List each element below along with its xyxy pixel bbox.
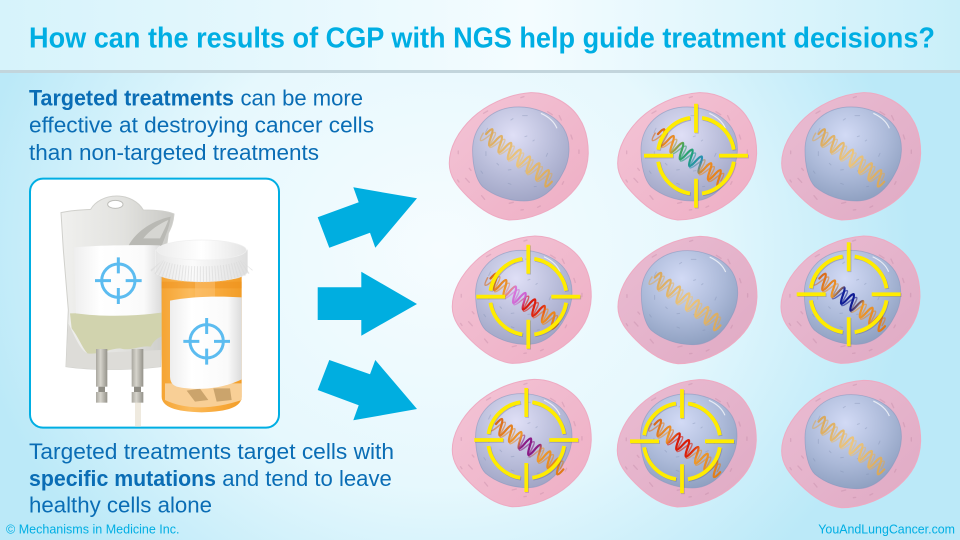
cell: row 1 column 3 [782,93,921,220]
copyright: © Mechanisms in Medicine Inc. [6,521,180,536]
reticle [474,388,579,493]
header band [0,0,960,73]
reticle [630,389,735,494]
cell: row 2 column 3, targeted [781,236,920,363]
text block: targeted treatments intro [29,86,374,165]
text block: specific mutations: Targeted treatments target cells with [29,439,394,464]
helix: healthy [479,126,556,189]
helix: healthy [648,270,725,332]
text block: specific mutations [29,439,394,518]
reticle [797,242,902,347]
reticle [644,104,749,208]
text block: targeted treatments intro: effective at destroying cancer cells [29,113,374,138]
reticle [476,245,581,350]
helix: purple mutation [489,416,568,476]
cell: row 1 column 1 [449,93,588,220]
arrow: upper [318,187,417,248]
website: YouAndLungCancer.com [818,521,955,536]
cell: row 3 column 2, targeted [617,380,756,507]
helix: healthy [811,126,889,189]
icon: pill bottle [156,240,248,412]
cell: row 3 column 3 [782,380,921,508]
helix: red mutation [647,417,725,479]
text block: targeted treatments intro: Targeted treatments [29,86,234,111]
text block: targeted treatments intro: than non-targeted treatments [29,140,319,165]
text block: targeted treatments intro: can be more [240,86,363,111]
text block: specific mutations: and tend to leave [222,466,392,491]
helix: healthy [811,414,889,476]
arrow: middle [318,272,417,336]
icon: IV bag [61,196,174,427]
cell: row 1 column 2, targeted [618,93,757,220]
cell: row 3 column 1, targeted [452,379,591,507]
text block: specific mutations: healthy cells alone [29,493,212,518]
helix: green mutation [651,126,728,189]
helix: pink and red mutation [483,271,562,331]
cell: row 2 column 2 [618,236,757,364]
arrow: lower [318,360,417,420]
cell: row 2 column 1, targeted [452,236,591,363]
helix: navy mutation [812,271,889,333]
text block: specific mutations: specific mutations [29,466,216,491]
panel: treatment illustration [30,179,279,428]
